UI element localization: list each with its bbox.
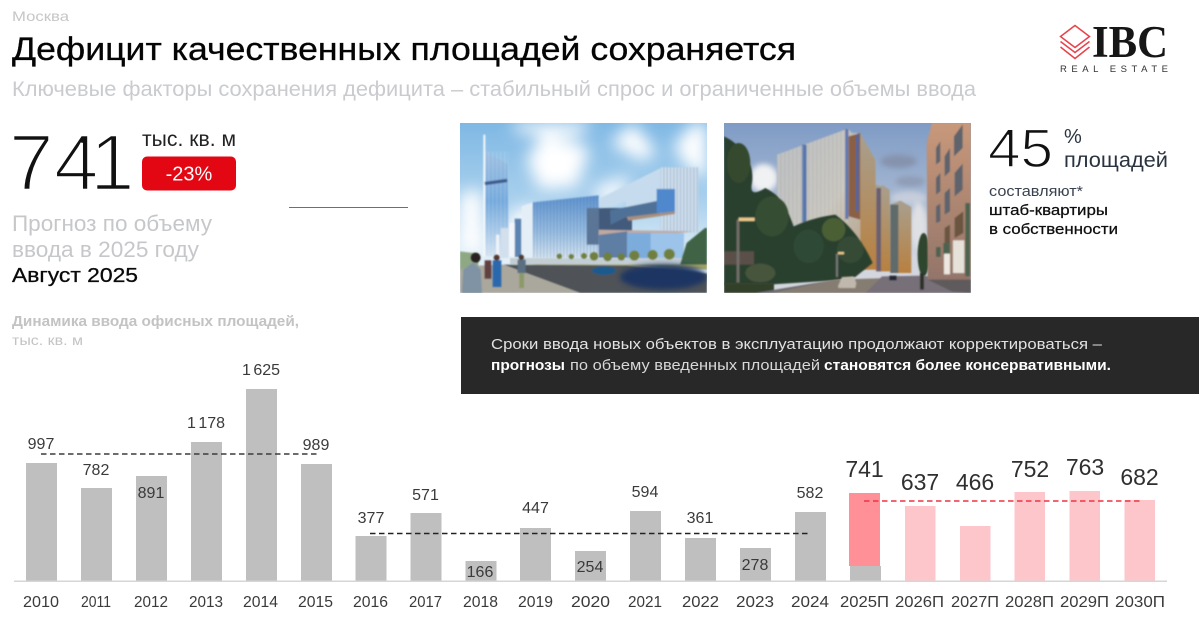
year labels: 2016 (353, 594, 388, 611)
year labels: 2012 (134, 594, 168, 611)
forecast description: Прогноз по объему (12, 211, 212, 236)
year labels: 2021 (628, 594, 662, 611)
region label: Москва (12, 8, 69, 24)
mid towers (876, 185, 890, 271)
year labels: 2028П (1005, 594, 1054, 611)
badge: change -23%: -23% (166, 164, 213, 186)
image: office complex rendering (460, 123, 707, 293)
value labels: 682 (1120, 464, 1159, 490)
callout: conservative forecasts: Сроки ввода новых объектов в эксплуатацию продолжают корректироваться – (491, 336, 1103, 353)
clouds (750, 155, 927, 250)
stat description: составляют* (989, 183, 1083, 200)
subtitle: Ключевые факторы сохранения дефицита – стабильный спрос и ограниченные объемы ввода (12, 78, 976, 101)
trees and ground (460, 228, 707, 293)
year labels: 2022 (682, 594, 719, 611)
value labels: 278 (742, 557, 768, 574)
value labels: 582 (797, 485, 823, 502)
value labels: 594 (632, 484, 658, 501)
trees (724, 136, 930, 284)
forecast bars (849, 491, 1155, 581)
value labels: 377 (358, 510, 384, 527)
percent sign: % (1064, 126, 1082, 148)
year labels: 2018 (463, 594, 498, 611)
year labels: 2020 (571, 594, 610, 611)
value labels: 752 (1011, 456, 1049, 482)
clouds (460, 123, 707, 256)
logo tagline: REAL ESTATE (1060, 64, 1168, 75)
year labels: 2019 (518, 594, 553, 611)
year labels: 2026П (895, 594, 944, 611)
callout: conservative forecasts: прогнозы (491, 357, 565, 374)
logo wordmark: IBC (1092, 17, 1168, 67)
callout: conservative forecasts: становятся более консервативными. (824, 357, 1111, 374)
year labels: 2013 (189, 594, 223, 611)
year labels: 2024 (791, 594, 829, 611)
year labels: 2025П (840, 594, 889, 611)
forecast description: Август 2025 (12, 265, 138, 287)
value labels: 989 (303, 437, 329, 454)
value labels: 254 (577, 559, 603, 576)
main tower (776, 128, 861, 242)
lamp posts (737, 220, 739, 283)
pedestrians (462, 262, 482, 293)
year labels: 2014 (243, 594, 278, 611)
cars (592, 266, 616, 275)
year labels: 2015 (298, 594, 333, 611)
street (724, 123, 971, 293)
low glass block (522, 202, 533, 258)
chart heading: Динамика ввода офисных площадей, (12, 313, 299, 330)
brick building (927, 123, 971, 291)
title: Дефицит качественных площадей сохраняется (12, 31, 796, 67)
year labels: 2030П (1115, 594, 1165, 611)
chart heading: тыс. кв. м (12, 332, 83, 348)
key figure: 741 (9, 118, 236, 207)
value labels: 571 (412, 487, 439, 504)
value labels: 741 (845, 456, 884, 482)
value labels: 997 (28, 436, 54, 453)
average lines (41, 454, 1141, 534)
stat: 45%: в собственности (989, 221, 1118, 238)
year labels: 2027П (951, 594, 999, 611)
forecast description (12, 211, 212, 287)
value labels (28, 362, 1159, 581)
callout: conservative forecasts (461, 317, 1199, 394)
callout: conservative forecasts: по объему введенных площадей (570, 357, 820, 374)
value labels: 361 (687, 510, 713, 527)
key figure: 741: 741 (9, 118, 134, 207)
year labels: 2017 (409, 594, 442, 611)
value labels: 1 625 (242, 362, 280, 379)
logo: IBC Real Estate (1060, 17, 1168, 75)
areas label: площадей (1064, 149, 1168, 172)
forecast description: ввода в 2025 году (12, 237, 199, 262)
stat: 45%: штаб-квартиры (989, 202, 1108, 219)
year labels: 2010 (23, 594, 59, 611)
tower (484, 152, 509, 256)
icon: layered diamonds (1060, 26, 1090, 58)
bar chart: office completions 2010-2030 (14, 362, 1167, 611)
value labels: 166 (467, 564, 493, 581)
historical bars (26, 389, 881, 581)
central structure (599, 208, 632, 235)
figure 45: 45 (988, 117, 1053, 179)
value labels: 891 (138, 485, 164, 502)
stat: 45% (988, 117, 1168, 238)
value labels: 1 178 (187, 415, 225, 432)
badge: change -23% (142, 156, 236, 190)
value labels: 466 (956, 469, 994, 495)
chart heading (12, 313, 299, 348)
year labels (23, 594, 1165, 611)
unit label: тыс. кв. м (142, 128, 236, 151)
car (838, 276, 856, 288)
divider line (289, 207, 408, 208)
pedestrian (920, 273, 924, 290)
value labels: 763 (1066, 454, 1104, 480)
value labels: 637 (901, 469, 939, 495)
year labels: 2029П (1060, 594, 1109, 611)
year labels: 2023 (736, 594, 774, 611)
image: high-rise office towers at dusk (724, 123, 971, 293)
axis (14, 580, 1167, 582)
year labels: 2011 (81, 594, 111, 611)
value labels: 782 (83, 462, 109, 479)
value labels: 447 (522, 500, 549, 517)
